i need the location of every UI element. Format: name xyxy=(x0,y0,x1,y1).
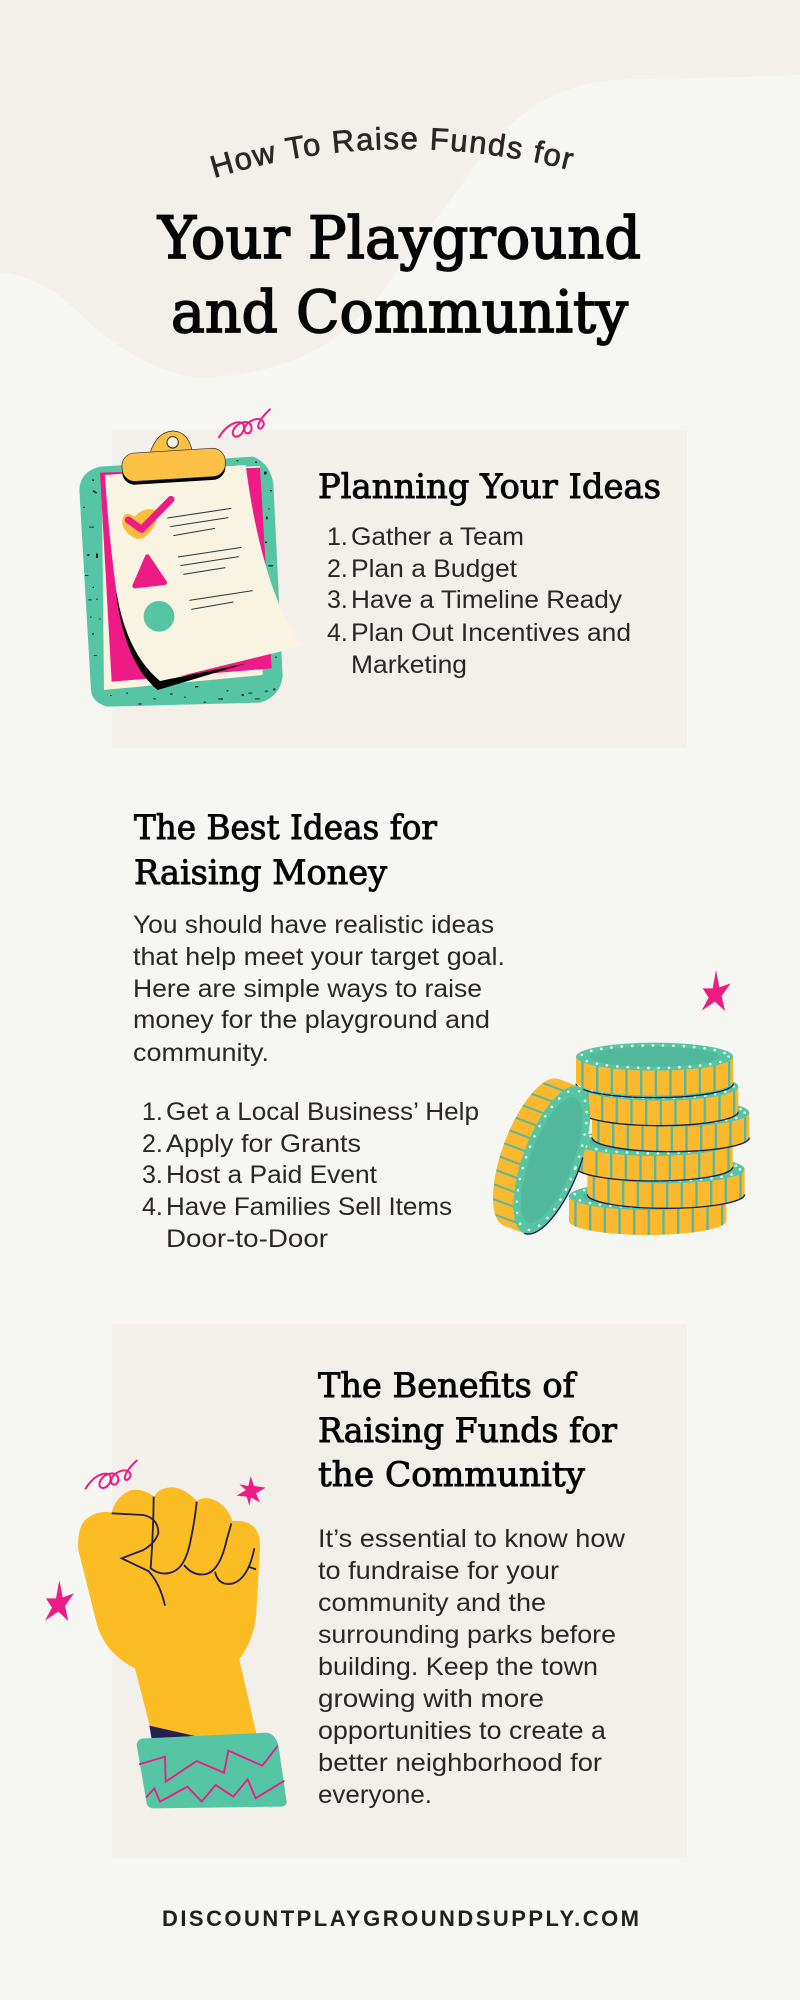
benefits paragraph: opportunities to create a xyxy=(318,1717,606,1745)
panel heading xyxy=(318,1366,618,1495)
title block xyxy=(156,126,641,346)
numbered list: Have a Timeline Ready xyxy=(351,586,623,614)
benefits paragraph: better neighborhood for xyxy=(318,1749,602,1777)
section heading xyxy=(134,808,438,893)
benefits paragraph: surrounding parks before xyxy=(318,1621,616,1649)
numbered list: Plan Out Incentives and xyxy=(351,619,631,647)
numbered list: Have Families Sell Items xyxy=(166,1193,452,1221)
title line two: and Community xyxy=(171,278,628,346)
numbered list: Door-to-Door xyxy=(166,1225,328,1253)
intro paragraph: You should have realistic ideas xyxy=(133,911,494,939)
benefits paragraph: everyone. xyxy=(318,1781,432,1809)
benefits paragraph: to fundraise for your xyxy=(318,1557,559,1585)
numbered list: 1. xyxy=(142,1098,163,1126)
intro paragraph: money for the playground and xyxy=(133,1006,490,1034)
panel background xyxy=(112,1324,687,1858)
numbered list: Marketing xyxy=(351,651,467,679)
numbered list: 4. xyxy=(327,619,348,647)
panel: planning your ideas xyxy=(79,409,687,748)
intro paragraph: community. xyxy=(133,1039,269,1067)
panel background xyxy=(112,430,687,748)
numbered list: 3. xyxy=(327,586,348,614)
section heading: The Best Ideas for xyxy=(134,808,438,848)
numbered list: Apply for Grants xyxy=(166,1130,361,1158)
numbered list xyxy=(327,523,631,679)
benefits paragraph: building. Keep the town xyxy=(318,1653,598,1681)
benefits paragraph: It’s essential to know how xyxy=(318,1525,626,1553)
intro paragraph: that help meet your target goal. xyxy=(133,943,505,971)
numbered list xyxy=(142,1098,479,1253)
numbered list: 4. xyxy=(142,1193,163,1221)
icon: raised fist xyxy=(45,1461,287,1808)
icon: coin stack xyxy=(477,970,749,1243)
panel heading: The Benefits of xyxy=(318,1366,577,1406)
benefits paragraph: community and the xyxy=(318,1589,546,1617)
numbered list: 3. xyxy=(142,1161,163,1189)
intro paragraph: Here are simple ways to raise xyxy=(133,975,482,1003)
benefits paragraph xyxy=(318,1525,626,1809)
numbered list: Plan a Budget xyxy=(351,555,517,583)
numbered list: Host a Paid Event xyxy=(166,1161,377,1189)
intro paragraph xyxy=(133,911,505,1067)
icon: clipboard checklist xyxy=(79,409,303,707)
panel heading: the Community xyxy=(318,1455,586,1495)
panel heading: Planning Your Ideas xyxy=(318,467,661,507)
numbered list: 2. xyxy=(327,555,348,583)
benefits paragraph: growing with more xyxy=(318,1685,544,1713)
curved subtitle: How To Raise Funds for xyxy=(210,126,574,178)
footer website: DISCOUNTPLAYGROUNDSUPPLY.COM xyxy=(162,1906,639,1931)
numbered list: 1. xyxy=(327,523,348,551)
panel heading: Raising Funds for xyxy=(318,1411,618,1451)
section heading: Raising Money xyxy=(134,853,388,893)
panel: benefits of raising funds xyxy=(45,1324,687,1858)
background blob xyxy=(0,0,800,377)
numbered list: Get a Local Business’ Help xyxy=(166,1098,479,1126)
section: best ideas for raising money xyxy=(133,808,749,1253)
numbered list: Gather a Team xyxy=(351,523,524,551)
title line one: Your Playground xyxy=(157,204,641,272)
numbered list: 2. xyxy=(142,1130,163,1158)
